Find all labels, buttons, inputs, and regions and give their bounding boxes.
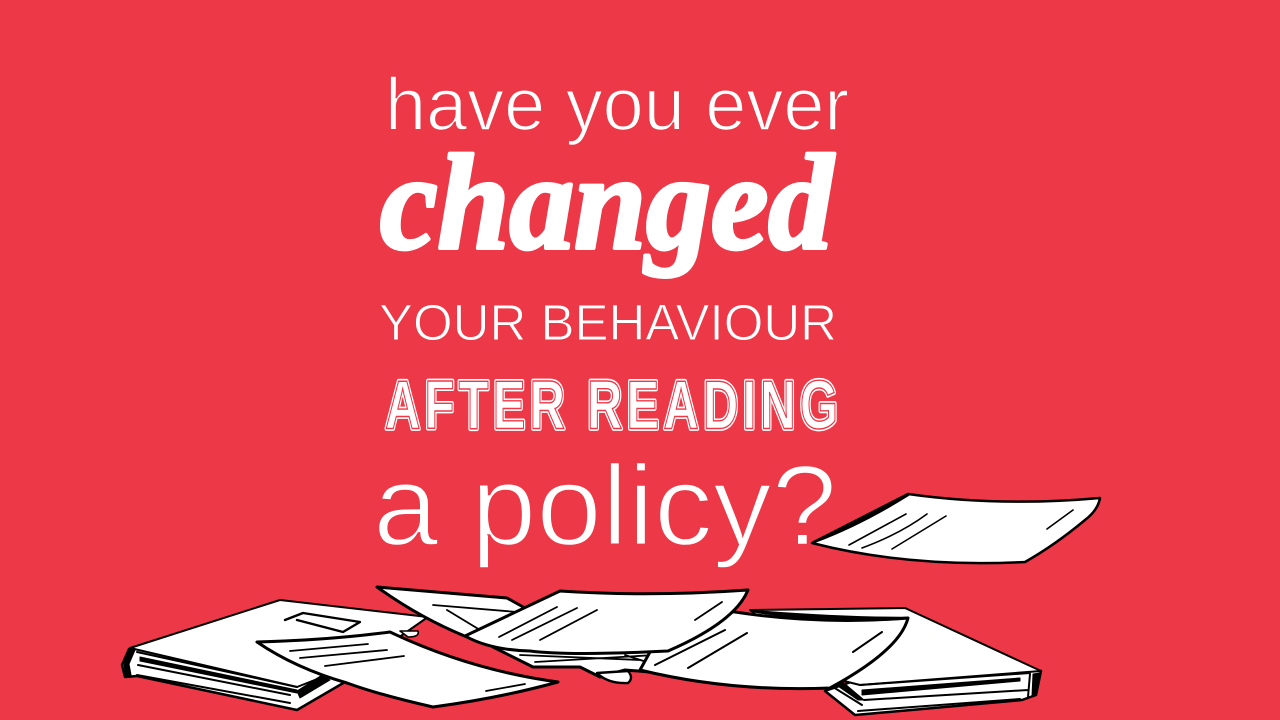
heading: have you ever: have you ever [385, 63, 849, 146]
left book [122, 600, 428, 710]
front centre sheet [465, 590, 748, 654]
heading: after reading: AFTER READING [385, 366, 838, 444]
illustration: flying sheet of paper [812, 494, 1100, 563]
heading: after reading: AFTER READING [385, 366, 838, 444]
heading: your behaviour: YOUR BEHAVIOUR [379, 294, 837, 351]
heading: changed: changed [380, 128, 835, 278]
heading: a policy?: a policy? [373, 443, 837, 570]
under-sheet layers and clip [493, 640, 668, 683]
right book [750, 608, 1041, 715]
back centre sheet [377, 587, 525, 640]
left loose sheet [257, 632, 558, 707]
illustration: pile of papers [122, 587, 1041, 715]
right loose sheet [640, 610, 908, 689]
